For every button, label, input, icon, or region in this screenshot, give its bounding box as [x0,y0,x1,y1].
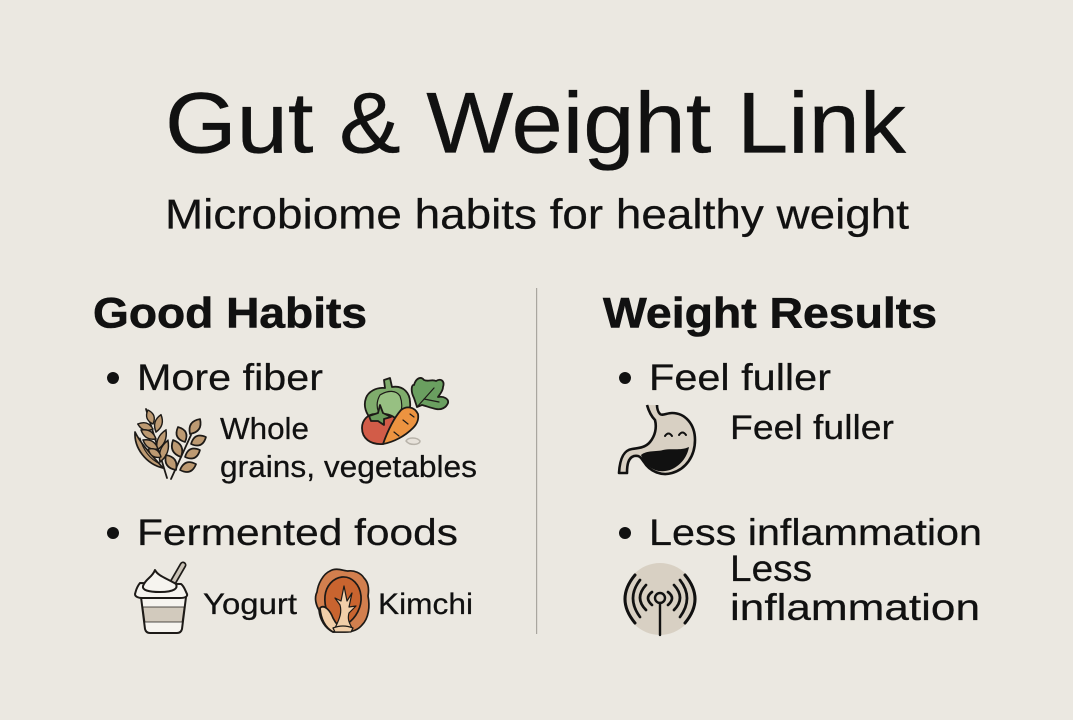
icon: wheat [135,409,208,479]
panel: weight results [603,290,982,635]
icon: stomach [619,405,695,474]
icon: kimchi [316,569,369,632]
text: yogurt: Yogurt [203,588,298,621]
subtitle: Microbiome habits for healthy weight [165,190,909,238]
item: less inflammation: Less inflammation [649,512,982,553]
text: feel fuller: Feel fuller [730,409,894,447]
text: grains, vegetables: grains, vegetables [220,449,477,484]
title: Gut & Weight Link [165,76,907,172]
heading: good habits: Good Habits [93,290,367,338]
text: kimchi: Kimchi [378,588,473,621]
icon: vegetables [362,378,448,444]
icon: yogurt [135,565,187,633]
item: fermented foods: Fermented foods [137,512,458,553]
text: less inflammation: Less [730,548,812,589]
item: more fiber: More fiber [137,357,323,398]
text: less inflammation [730,548,980,628]
text: whole: Whole [220,411,309,446]
heading: weight results: Weight Results [603,290,937,338]
text: less inflammation: inflammation [730,587,980,628]
panel: good habits [93,290,477,633]
icon: inflammation signal [624,563,696,635]
item: feel fuller: Feel fuller [649,357,831,398]
